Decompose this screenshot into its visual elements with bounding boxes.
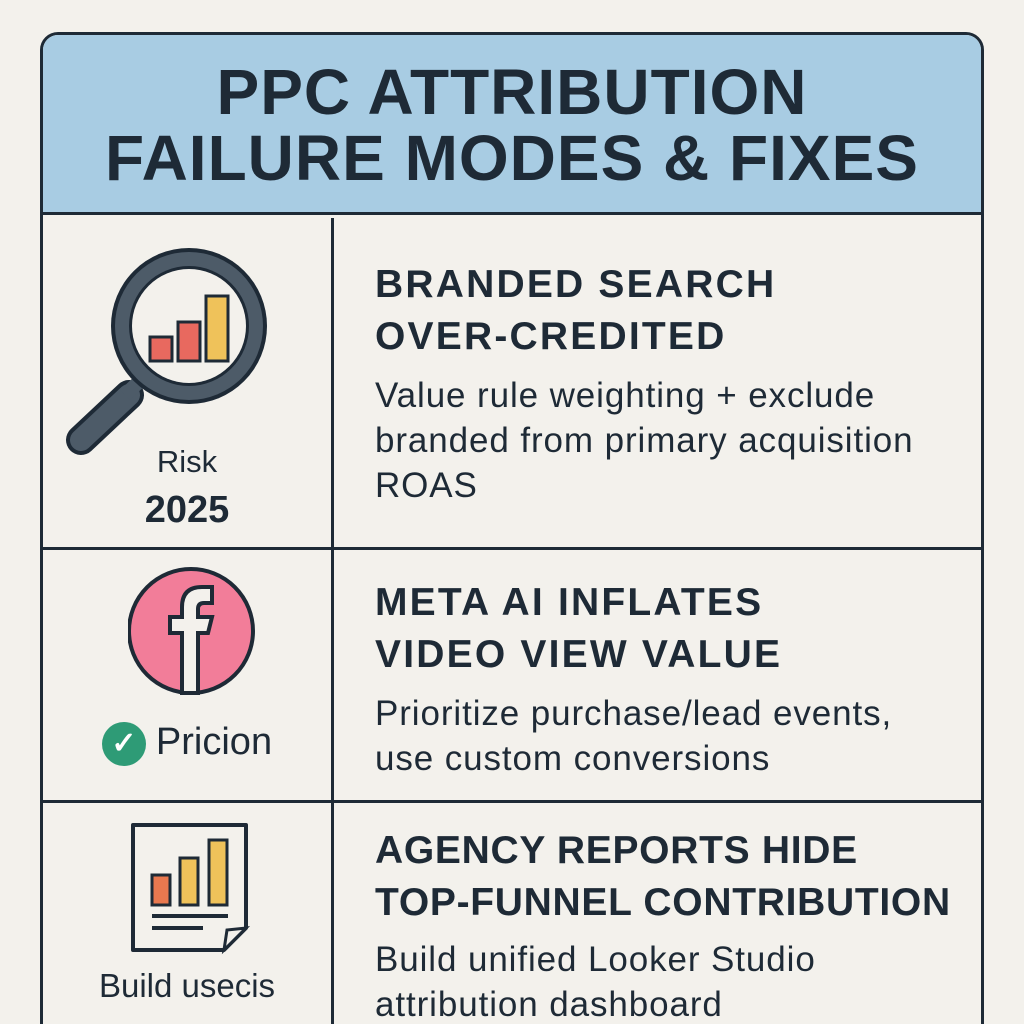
row3 heading: AGENCY REPORTS HIDE	[375, 829, 858, 872]
row1 body	[375, 376, 913, 505]
label: Build usecis: Build usecis	[99, 967, 275, 1004]
row1 heading	[375, 263, 776, 358]
row2 body	[375, 694, 892, 778]
label: Risk 2025: 2025	[145, 489, 229, 531]
icon: report document	[131, 823, 250, 954]
row3 body: Build unified Looker Studio	[375, 940, 816, 979]
title: PPC ATTRIBUTION	[217, 56, 807, 128]
label: Pricion	[102, 721, 272, 766]
icon: magnifier with bars	[66, 248, 267, 455]
title	[43, 35, 981, 215]
row1 heading: OVER-CREDITED	[375, 315, 726, 358]
label: Risk 2025: Risk	[157, 444, 217, 479]
row3 body: attribution dashboard	[375, 985, 723, 1024]
label: Risk 2025	[145, 444, 229, 531]
row1 heading: BRANDED SEARCH	[375, 263, 776, 306]
label: Pricion: ✓	[111, 727, 136, 760]
row2 heading: VIDEO VIEW VALUE	[375, 633, 782, 676]
row2 heading: META AI INFLATES	[375, 581, 763, 624]
row1 body: Value rule weighting + exclude	[375, 376, 875, 415]
row2 body: use custom conversions	[375, 739, 770, 778]
row3 heading	[375, 829, 951, 924]
row2 body: Prioritize purchase/lead events,	[375, 694, 892, 733]
row3 body	[375, 940, 816, 1024]
row3 heading: TOP-FUNNEL CONTRIBUTION	[375, 881, 951, 924]
icon: facebook	[128, 567, 255, 695]
title: FAILURE MODES & FIXES	[105, 122, 919, 194]
row1 body: ROAS	[375, 466, 478, 505]
row1 body: branded from primary acquisition	[375, 421, 913, 460]
label: Pricion: Pricion	[156, 721, 272, 763]
row2 heading	[375, 581, 782, 676]
